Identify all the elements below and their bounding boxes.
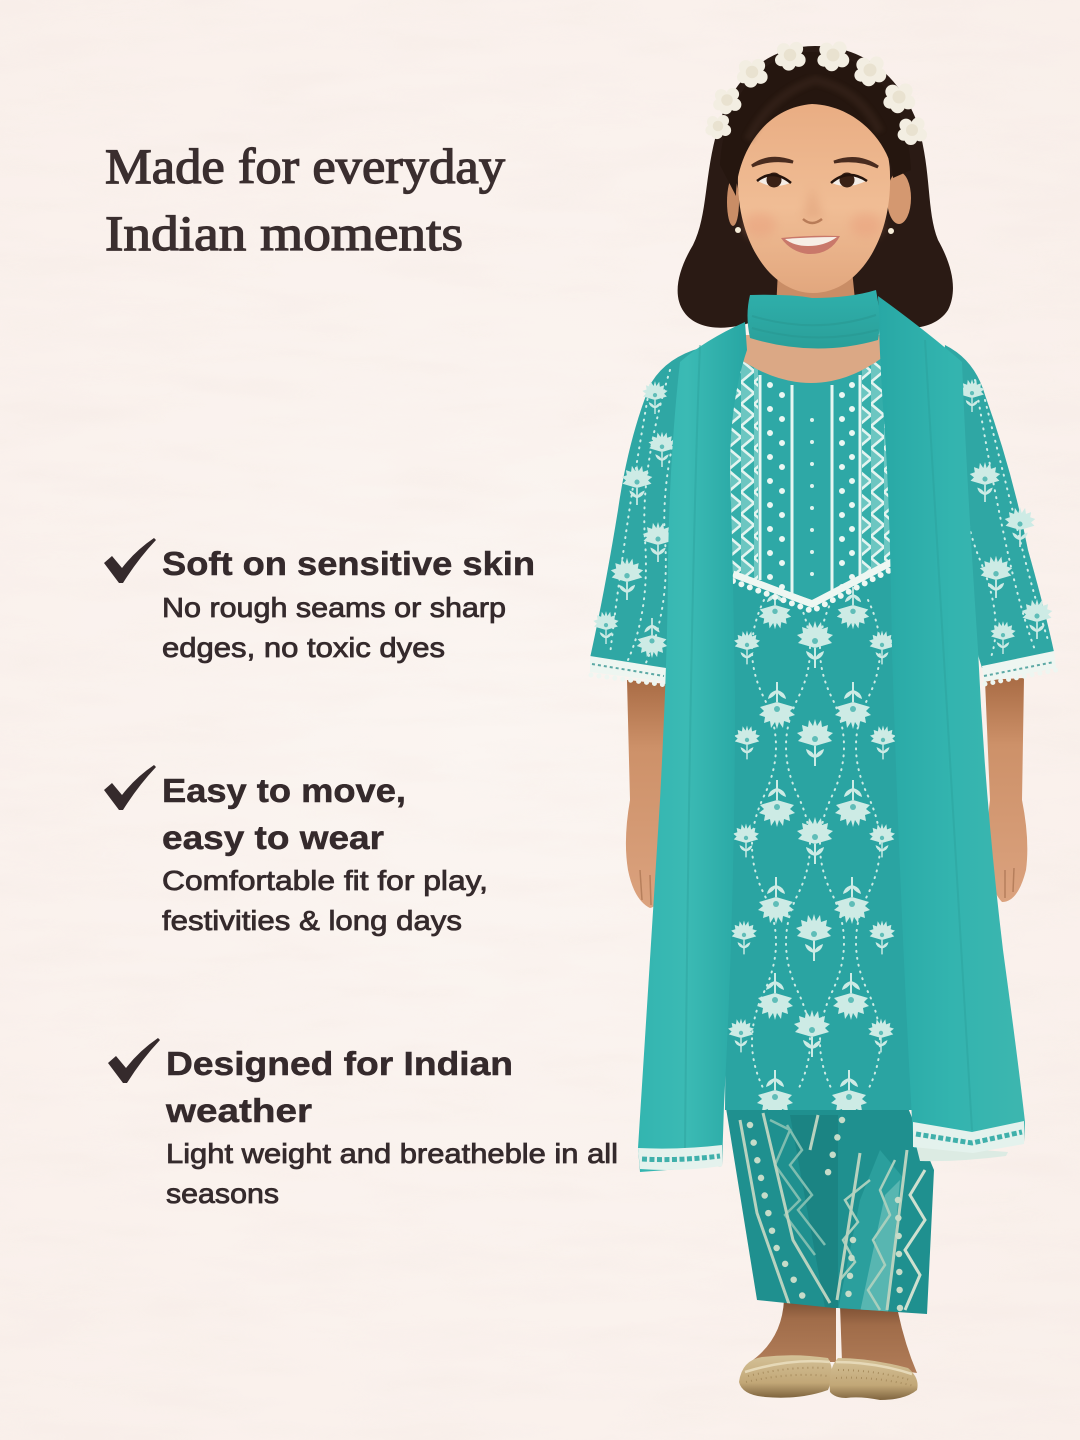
benefit heading: Soft on sensitive skin xyxy=(162,545,535,582)
right sleeve xyxy=(930,345,1056,684)
shoes xyxy=(739,1355,918,1400)
benefit description: edges, no toxic dyes xyxy=(162,632,445,663)
benefit heading xyxy=(165,1045,513,1129)
benefit description xyxy=(162,592,506,663)
right cuff lace xyxy=(982,651,1056,682)
benefit heading: easy to wear xyxy=(162,819,384,856)
icon: check mark xyxy=(108,1038,160,1083)
left sleeve xyxy=(590,348,700,685)
benefit heading xyxy=(162,772,406,856)
hair shine xyxy=(748,80,880,140)
title: Made for everyday xyxy=(105,138,505,194)
flower headband xyxy=(705,41,927,145)
face shape xyxy=(738,103,890,293)
mouth xyxy=(781,236,840,254)
benefit: soft on sensitive skin xyxy=(104,538,535,663)
dupatta right panel xyxy=(878,296,1025,1161)
benefit description: seasons xyxy=(166,1178,279,1209)
hair back xyxy=(678,46,953,328)
arms xyxy=(626,678,1027,908)
benefit heading: Designed for Indian xyxy=(166,1045,513,1082)
benefit description: Light weight and breatheble in all xyxy=(166,1138,618,1169)
nose xyxy=(803,219,822,223)
scarf around neck xyxy=(748,290,880,349)
benefit heading: Easy to move, xyxy=(162,772,406,809)
cheek blush xyxy=(744,186,882,237)
benefit description xyxy=(162,865,488,936)
kurta yoke xyxy=(725,355,895,605)
earrings xyxy=(735,227,741,233)
eyebrows xyxy=(752,158,878,167)
benefit description: No rough seams or sharp xyxy=(162,592,506,623)
chest skin xyxy=(740,335,884,384)
benefit description xyxy=(166,1138,618,1209)
benefit heading: weather xyxy=(165,1092,312,1129)
ears xyxy=(727,178,739,226)
dupatta left border xyxy=(638,1145,722,1170)
figure: girl in teal kurta set xyxy=(590,41,1056,1400)
title xyxy=(105,138,505,261)
benefit: easy to move xyxy=(104,765,488,936)
icon: check mark xyxy=(104,765,156,810)
yoke lace trim xyxy=(733,562,892,611)
kurta body xyxy=(720,560,915,1120)
face xyxy=(720,52,911,293)
benefit description: festivities & long days xyxy=(162,905,462,936)
feet xyxy=(750,1300,917,1373)
hair top xyxy=(720,52,911,196)
dupatta right border xyxy=(913,1121,1024,1161)
dupatta left panel xyxy=(638,322,747,1172)
eyes xyxy=(757,172,867,188)
benefit description: Comfortable fit for play, xyxy=(162,865,488,896)
icon: check mark xyxy=(104,538,156,583)
benefit: designed for Indian weather xyxy=(108,1038,618,1209)
neck xyxy=(776,270,856,310)
left cuff lace xyxy=(590,656,666,682)
pants xyxy=(726,1110,934,1314)
title: Indian moments xyxy=(105,205,463,261)
